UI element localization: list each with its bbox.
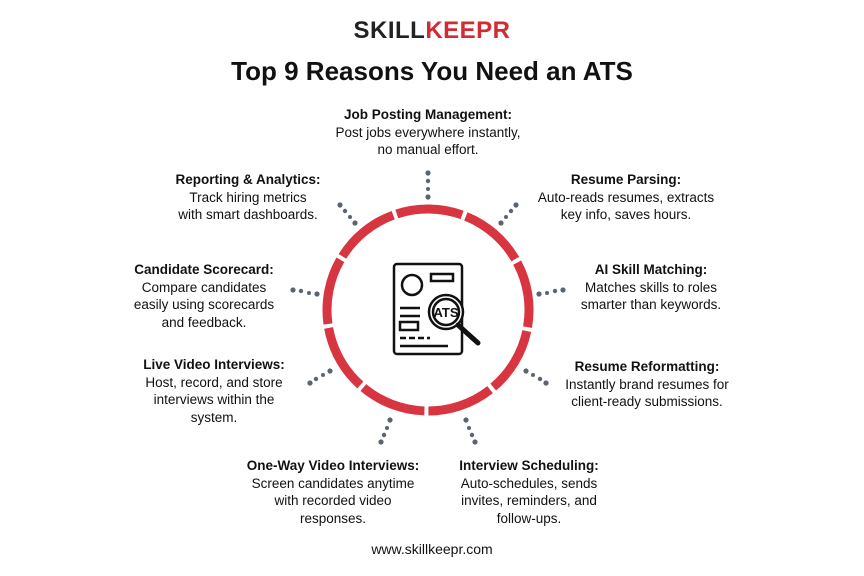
text: Live Video Interviews: Host, record, and store xyxy=(145,374,283,390)
text: Interview Scheduling xyxy=(459,458,599,526)
text: Resume Reformatting: client-ready submissions. xyxy=(571,394,723,409)
text: Interview Scheduling: invites, reminders, and xyxy=(461,493,597,508)
text: Job Posting Management xyxy=(335,107,521,157)
text: AI Skill Matching xyxy=(581,262,721,312)
text: Reporting & Analytics: with smart dashboards. xyxy=(178,207,318,222)
footer url: www.skillkeepr.com xyxy=(371,541,493,557)
text: Candidate Scorecard xyxy=(134,262,274,330)
text: Candidate Scorecard: Compare candidates xyxy=(142,280,266,294)
text: Interview Scheduling: follow-ups. xyxy=(497,510,561,526)
icon: ATS resume with magnifier xyxy=(394,264,478,354)
text: Reporting & Analytics xyxy=(175,172,320,222)
text: AI Skill Matching: Matches skills to roles xyxy=(585,280,717,294)
text: Resume Reformatting: Resume Reformatting: xyxy=(575,359,719,374)
ring diagram: ATS xyxy=(433,305,459,320)
text: Live Video Interviews: Live Video Interviews: xyxy=(143,357,285,372)
logo: SKILLKEEPR xyxy=(353,17,510,44)
text: Resume Reformatting xyxy=(565,359,729,409)
text: Interview Scheduling: Interview Scheduling: xyxy=(459,458,599,473)
text: Live Video Interviews xyxy=(143,357,285,425)
text: One-Way Video Interviews: Screen candidates anytime xyxy=(252,476,414,490)
text: One-Way Video Interviews: One-Way Video Interviews: xyxy=(247,458,419,473)
text: Candidate Scorecard: easily using scorecards xyxy=(134,297,274,312)
text: Reporting & Analytics: Reporting & Analytics: xyxy=(175,172,320,187)
text: One-Way Video Interviews: with recorded video xyxy=(274,493,392,508)
text: Resume Parsing xyxy=(538,172,714,222)
text: Resume Parsing: Auto-reads resumes, extracts xyxy=(538,190,714,204)
text: Live Video Interviews: interviews within the xyxy=(154,392,274,407)
text: Interview Scheduling: Auto-schedules, sends xyxy=(461,476,597,490)
text: Resume Parsing: key info, saves hours. xyxy=(561,207,691,222)
title: Top 9 Reasons You Need an ATS xyxy=(231,56,633,86)
text: Candidate Scorecard: and feedback. xyxy=(162,314,246,330)
text: Job Posting Management: no manual effort. xyxy=(377,142,479,157)
text: AI Skill Matching: smarter than keywords. xyxy=(581,297,721,312)
text: One-Way Video Interviews xyxy=(247,458,419,526)
text: One-Way Video Interviews: responses. xyxy=(300,510,366,526)
text: Job Posting Management: Post jobs everywhere instantly, xyxy=(335,124,521,140)
text: Reporting & Analytics: Track hiring metrics xyxy=(189,190,307,204)
text: Job Posting Management: Job Posting Management: xyxy=(344,107,512,122)
text: Live Video Interviews: system. xyxy=(191,410,237,424)
text: Resume Reformatting: Instantly brand resumes for xyxy=(565,376,729,392)
text: Candidate Scorecard: Candidate Scorecard: xyxy=(134,262,274,277)
text: Resume Parsing: Resume Parsing: xyxy=(571,172,681,187)
text: AI Skill Matching: AI Skill Matching: xyxy=(595,262,707,277)
